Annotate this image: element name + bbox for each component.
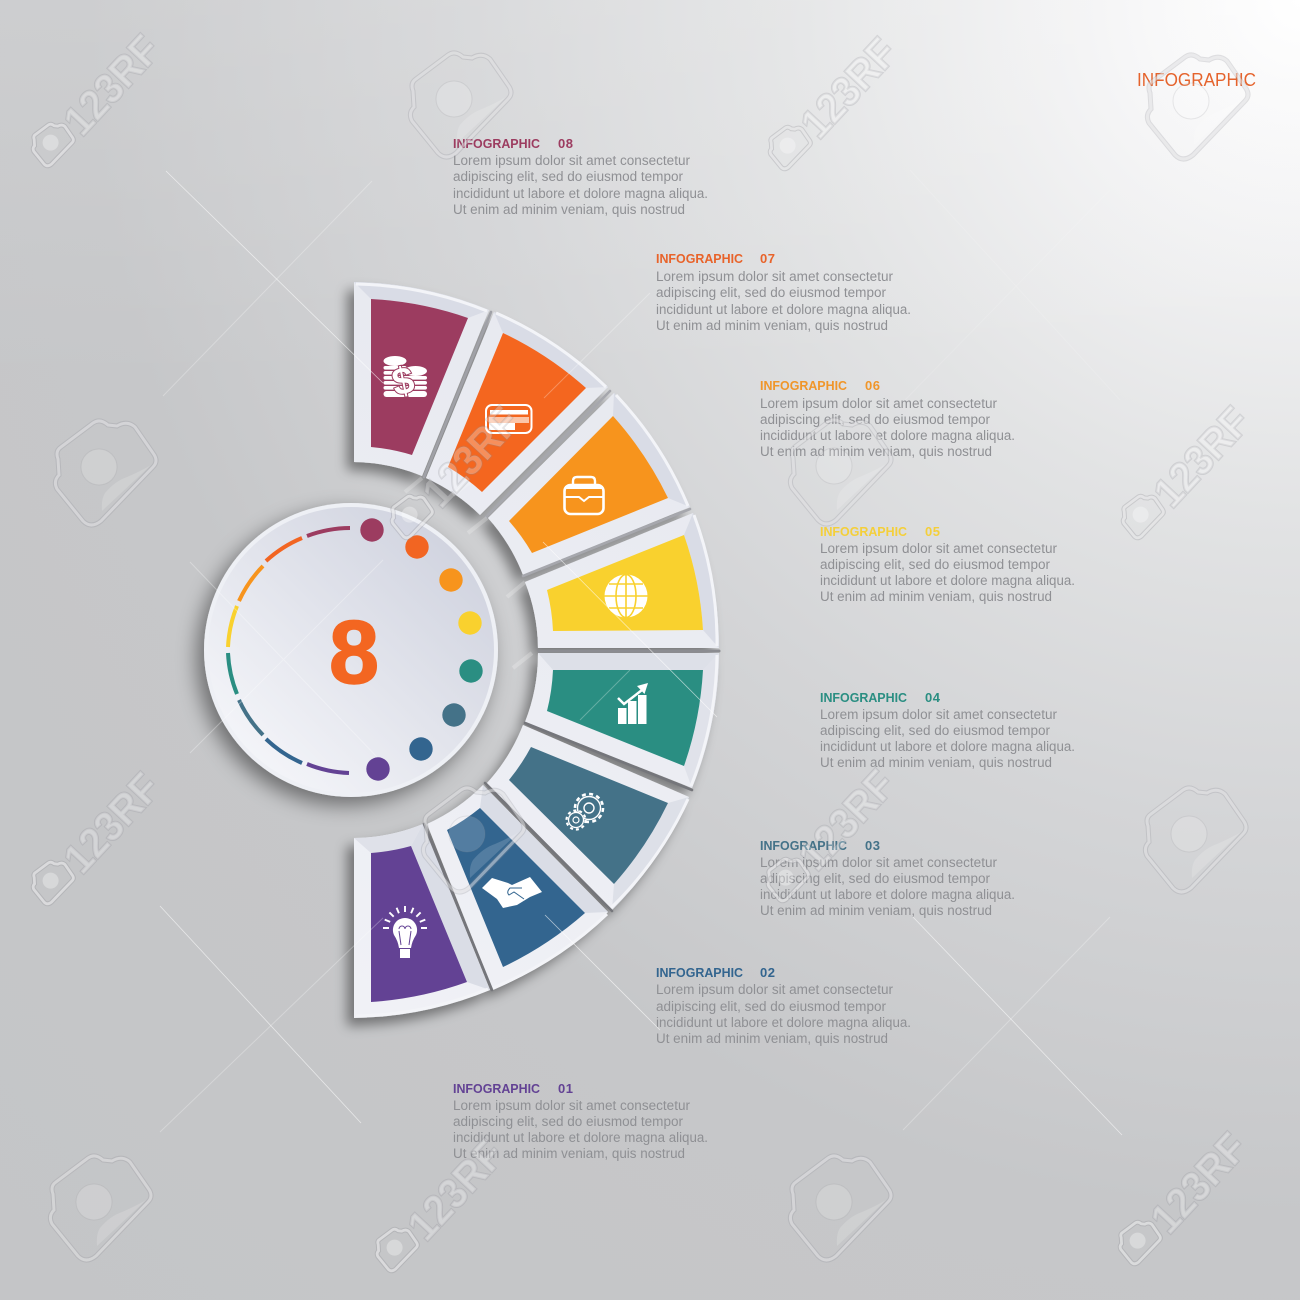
segment 02 color panel (447, 808, 585, 967)
body 08 (453, 153, 708, 217)
heading 03: INFOGRAPHIC (760, 838, 848, 853)
body 04 (820, 707, 1075, 770)
body 07: adipiscing elit, sed do eiusmod tempor (656, 285, 886, 300)
title: INFOGRAPHIC top right: INFOGRAPHIC (1137, 70, 1256, 90)
heading 04: 04 (925, 690, 941, 705)
background cross lines (160, 170, 1122, 1135)
body 02 (656, 982, 911, 1046)
segment 03 color panel (509, 747, 668, 884)
body 01 (453, 1098, 708, 1161)
icon: light bulb (383, 906, 427, 958)
watermark logos 123RF: 123RF (398, 1131, 513, 1249)
icon: coins (384, 356, 427, 405)
body 02: Ut enim ad minim veniam, quis nostrud (656, 1031, 888, 1046)
watermark logos 123RF: 123RF (789, 761, 904, 879)
panel: half ring of frames (354, 282, 719, 1018)
body 08: incididunt ut labore et dolore magna aliqua. (453, 186, 708, 201)
heading 02: 02 (760, 965, 775, 980)
heading 07: 07 (760, 251, 775, 266)
heading 06: INFOGRAPHIC (760, 378, 848, 393)
heading 03: 03 (865, 838, 880, 853)
label 07 (656, 251, 911, 333)
body 02: adipiscing elit, sed do eiusmod tempor (656, 999, 886, 1014)
label 06 (760, 378, 1015, 459)
body 01: Ut enim ad minim veniam, quis nostrud (453, 1146, 685, 1161)
segment 08 color panel (371, 299, 468, 455)
segment 01 color panel (371, 846, 467, 1002)
body 07 (656, 269, 911, 333)
disc number 8: 8 (329, 603, 379, 703)
heading 01: INFOGRAPHIC (453, 1081, 541, 1096)
body 05: incididunt ut labore et dolore magna aliqua. (820, 573, 1075, 588)
body 05: adipiscing elit, sed do eiusmod tempor (820, 557, 1050, 572)
watermark logos 123RF: 123RF (1144, 398, 1259, 516)
heading 01: 01 (558, 1081, 573, 1096)
body 02: Lorem ipsum dolor sit amet consectetur (656, 982, 893, 997)
segment 06 color panel (509, 416, 668, 553)
body 06: Lorem ipsum dolor sit amet consectetur (760, 396, 997, 411)
icon: globe (604, 574, 648, 618)
segment 04 color panel (547, 670, 703, 766)
heading 05: INFOGRAPHIC (820, 524, 908, 539)
icon: rising bar chart (618, 683, 648, 724)
body 07: Lorem ipsum dolor sit amet consectetur (656, 269, 893, 284)
heading 08: INFOGRAPHIC (453, 136, 541, 151)
icon: coins: $ (389, 359, 418, 405)
light streaks near gaps (405, 478, 532, 668)
body 01: Lorem ipsum dolor sit amet consectetur (453, 1098, 690, 1113)
body 05: Lorem ipsum dolor sit amet consectetur (820, 541, 1057, 556)
body 02: incididunt ut labore et dolore magna aliqua. (656, 1015, 911, 1030)
icon: handshake (482, 877, 542, 908)
label 08 (453, 136, 708, 217)
body 06: Ut enim ad minim veniam, quis nostrud (760, 444, 992, 459)
watermark logos 123RF: 123RF (1141, 1124, 1256, 1242)
body 06: incididunt ut labore et dolore magna aliqua. (760, 428, 1015, 443)
heading 02: INFOGRAPHIC (656, 965, 744, 980)
label 04 (820, 690, 1075, 770)
body 04: Lorem ipsum dolor sit amet consectetur (820, 707, 1057, 722)
body 05 (820, 541, 1075, 604)
dark gaps between frames (424, 312, 719, 990)
body 07: Ut enim ad minim veniam, quis nostrud (656, 318, 888, 333)
heading 07: INFOGRAPHIC (656, 251, 744, 266)
label 01 (453, 1081, 708, 1161)
icon: credit card (486, 405, 532, 433)
body 04: adipiscing elit, sed do eiusmod tempor (820, 723, 1050, 738)
label 03 (760, 838, 1015, 918)
heading 06: 06 (865, 378, 880, 393)
icon: briefcase (564, 477, 604, 514)
body 06: adipiscing elit, sed do eiusmod tempor (760, 412, 990, 427)
body 05: Ut enim ad minim veniam, quis nostrud (820, 589, 1052, 604)
heading 08: 08 (558, 136, 573, 151)
body 03: incididunt ut labore et dolore magna aliqua. (760, 887, 1015, 902)
colored dots (360, 518, 483, 781)
body 03: adipiscing elit, sed do eiusmod tempor (760, 871, 990, 886)
label 05 (820, 524, 1075, 604)
panel: central disc (204, 503, 498, 797)
watermark logos 123RF: 123RF (54, 764, 169, 882)
segment 05 color panel (547, 535, 703, 631)
heading 04: INFOGRAPHIC (820, 690, 908, 705)
frames base with shadow (354, 282, 719, 1018)
body 04: incididunt ut labore et dolore magna aliqua. (820, 739, 1075, 754)
outer rim highlights (356, 284, 717, 1016)
segment 07 color panel (448, 333, 586, 492)
body 01: incididunt ut labore et dolore magna aliqua. (453, 1130, 708, 1145)
body 08: Lorem ipsum dolor sit amet consectetur (453, 153, 690, 168)
watermark logos 123RF: 123RF (413, 398, 528, 516)
heading 05: 05 (925, 524, 940, 539)
body 01: adipiscing elit, sed do eiusmod tempor (453, 1114, 683, 1129)
body 03 (760, 855, 1015, 918)
body 07: incididunt ut labore et dolore magna aliqua. (656, 302, 911, 317)
body 04: Ut enim ad minim veniam, quis nostrud (820, 755, 1052, 770)
body 06 (760, 396, 1015, 459)
watermark logos 123RF: 123RF (791, 29, 906, 147)
body 03: Lorem ipsum dolor sit amet consectetur (760, 855, 997, 870)
label 02 (656, 965, 911, 1046)
frame darker bevel bands (354, 282, 719, 990)
body 08: adipiscing elit, sed do eiusmod tempor (453, 169, 683, 184)
body 08: Ut enim ad minim veniam, quis nostrud (453, 202, 685, 217)
watermark logos 123RF: 123RF (54, 26, 169, 144)
dashed ring of colored arcs (228, 528, 350, 773)
body 03: Ut enim ad minim veniam, quis nostrud (760, 903, 992, 918)
icon: gears (566, 794, 603, 830)
